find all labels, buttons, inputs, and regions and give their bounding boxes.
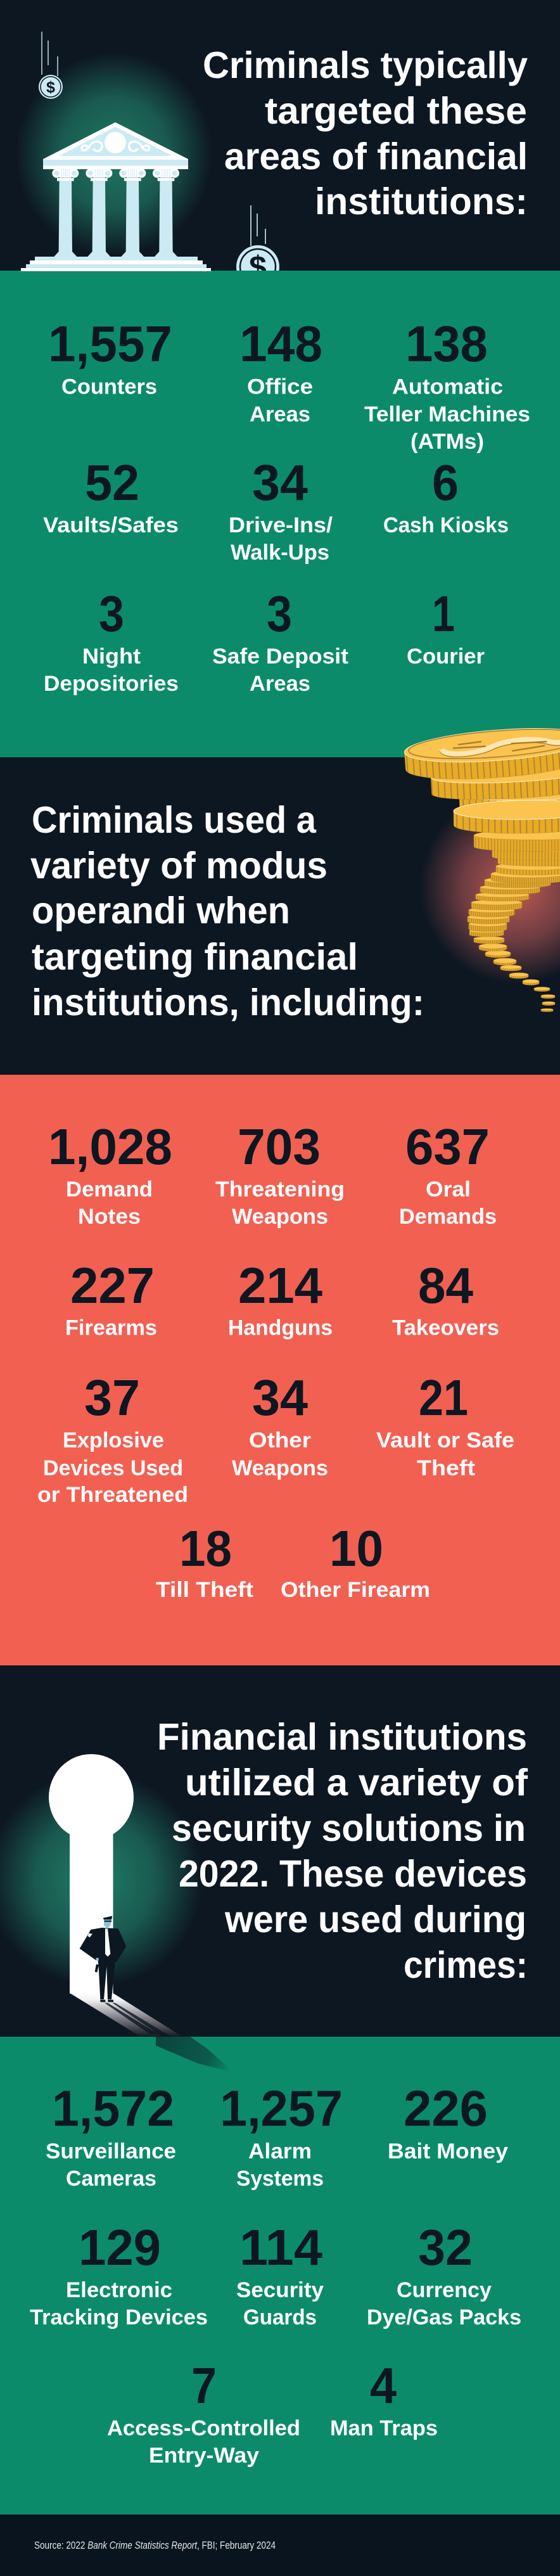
panel: targeted areas (0, 271, 560, 757)
icon: small falling coin: $ (46, 79, 55, 96)
stat: explosive devices: Devices Used (43, 1456, 183, 1480)
stat: surveillance cameras: 1,572 (52, 2080, 174, 2137)
stat: electronic tracking devices (30, 2219, 208, 2329)
stat: explosive devices: 37 (84, 1369, 140, 1426)
stat: night depositories (44, 586, 179, 696)
stat: office areas: Areas (250, 402, 310, 426)
heading: security solutions: 2022. These devices (179, 1853, 527, 1895)
heading: security solutions: utilized a variety of (185, 1762, 528, 1804)
stat: other firearm: Other Firearm (281, 1578, 430, 1602)
stat: handguns: Handguns (228, 1316, 333, 1340)
stat: safe deposit areas: Areas (250, 672, 310, 696)
stat: vault or safe theft (376, 1369, 514, 1480)
stat: drive-ins: Drive-Ins/ (229, 513, 333, 537)
icon: bank building with glow (16, 53, 212, 271)
stat: vaults and safes (43, 454, 179, 537)
stat: surveillance cameras (46, 2080, 176, 2191)
heading: modus operandi: operandi when (32, 890, 290, 932)
icon: falling coin behind green panel (236, 205, 279, 271)
stat: ATMs: Teller Machines (364, 402, 530, 426)
stat: takeovers: Takeovers (392, 1316, 499, 1340)
stat: currency dye and gas packs (367, 2219, 521, 2329)
stat: bait money (388, 2080, 508, 2163)
stat: alarm systems: Systems (236, 2167, 324, 2191)
heading: modus operandi: institutions, including: (32, 982, 424, 1023)
stat: firearms: 227 (70, 1257, 155, 1314)
heading: security solutions (157, 1716, 528, 1986)
stat: access-controlled entry-way: Access-Controlled (107, 2416, 300, 2440)
stat: cash kiosks: Cash Kiosks (383, 513, 509, 537)
stat: cash kiosks (383, 454, 509, 537)
stat: takeovers (392, 1257, 499, 1340)
stat: threatening weapons: 703 (238, 1118, 321, 1175)
stat: drive-ins (229, 454, 333, 565)
stat: ATMs (364, 316, 530, 454)
stat: vault or safe theft: Theft (417, 1456, 476, 1480)
heading: targeted areas: areas of financial (224, 136, 528, 177)
stat: counters: 1,557 (48, 316, 172, 372)
stat: oral demands: Oral (426, 1177, 471, 1201)
stat: bait money: 226 (404, 2080, 488, 2137)
stat: other weapons (232, 1369, 328, 1480)
stat: demand notes: Notes (78, 1205, 141, 1229)
stat: firearms: Firearms (65, 1316, 157, 1340)
stat: safe deposit areas: 3 (267, 586, 292, 642)
stat: other firearm: 10 (329, 1520, 383, 1577)
stat: security guards: Security (236, 2278, 324, 2302)
stat: threatening weapons: Threatening (215, 1177, 345, 1201)
stat: security guards: Guards (243, 2305, 317, 2329)
stat: demand notes (48, 1118, 172, 1229)
stat: surveillance cameras: Surveillance (46, 2139, 176, 2163)
heading: targeted areas: targeted these (265, 90, 527, 132)
stat: explosive devices (37, 1369, 188, 1507)
stat: currency dye and gas packs: Dye/Gas Packs (367, 2305, 521, 2329)
stat: oral demands: 637 (405, 1118, 490, 1175)
stat: till theft: Till Theft (156, 1578, 254, 1602)
stat: vault or safe theft: Vault or Safe (376, 1428, 514, 1452)
stat: till theft (156, 1520, 254, 1602)
heading: security solutions: security solutions in (172, 1807, 526, 1849)
stat: counters (48, 316, 172, 399)
stat: safe deposit areas (212, 586, 349, 696)
stat: office areas: 148 (239, 316, 322, 372)
stat: other firearm (281, 1520, 430, 1602)
heading: modus operandi: targeting financial (32, 936, 358, 978)
stat: courier (407, 586, 485, 669)
stat: man traps (330, 2357, 438, 2440)
stat: safe deposit areas: Safe Deposit (212, 644, 349, 669)
icon: small falling coin (39, 32, 63, 99)
stat: courier: 1 (432, 586, 455, 642)
stat: vault or safe theft: 21 (419, 1369, 468, 1426)
stat: counters: Counters (61, 375, 157, 399)
stat: cash kiosks: 6 (432, 454, 459, 511)
stat: other weapons: Weapons (232, 1456, 328, 1480)
stat: other weapons: Other (249, 1428, 311, 1452)
stat: drive-ins: 34 (252, 454, 309, 511)
stat: explosive devices: or Threatened (37, 1483, 188, 1507)
stat: alarm systems (220, 2080, 343, 2191)
stat: ATMs: Automatic (392, 375, 503, 399)
stat: bait money: Bait Money (388, 2139, 508, 2163)
stat: demand notes: Demand (66, 1177, 153, 1201)
stat: vaults and safes: Vaults/Safes (43, 513, 179, 537)
stat: office areas: Office (247, 375, 313, 399)
stat: vaults and safes: 52 (85, 454, 139, 511)
stat: security guards (236, 2219, 324, 2329)
stat: night depositories: 3 (99, 586, 124, 642)
stat: threatening weapons (215, 1118, 345, 1229)
heading: security solutions: crimes: (404, 1944, 528, 1986)
stat: handguns: 214 (238, 1257, 322, 1314)
stat: drive-ins: Walk-Ups (231, 541, 329, 565)
heading: modus operandi: variety of modus (30, 845, 328, 887)
stat: currency dye and gas packs: Currency (397, 2278, 492, 2302)
heading: security solutions: Financial institutions (157, 1716, 527, 1758)
stat: alarm systems: Alarm (248, 2139, 312, 2163)
icon: tornado of gold coins (404, 723, 560, 1011)
stat: explosive devices: Explosive (63, 1428, 164, 1452)
stat: till theft: 18 (179, 1520, 232, 1577)
stat: handguns (228, 1257, 333, 1340)
stat: access-controlled entry-way: 7 (191, 2357, 217, 2414)
stat: man traps: Man Traps (330, 2416, 438, 2440)
stat: ATMs: 138 (405, 316, 488, 372)
heading: targeted areas: institutions: (315, 181, 528, 222)
stat: security guards: 114 (239, 2219, 323, 2276)
stat: currency dye and gas packs: 32 (418, 2219, 473, 2276)
stat: electronic tracking devices: Tracking Devices (30, 2305, 208, 2329)
stat: surveillance cameras: Cameras (66, 2167, 156, 2191)
stat: electronic tracking devices: Electronic (66, 2278, 172, 2302)
stat: takeovers: 84 (418, 1257, 473, 1314)
heading: targeted areas (203, 44, 528, 222)
footer: source line (0, 2515, 560, 2576)
stat: oral demands: Demands (399, 1205, 497, 1229)
heading: modus operandi: Criminals used a (32, 799, 317, 841)
stat: ATMs: (ATMs) (410, 430, 484, 454)
stat: courier: Courier (407, 644, 485, 669)
heading: modus operandi (30, 799, 424, 1023)
icon: falling coin behind green panel: $ (249, 250, 267, 285)
stat: access-controlled entry-way (107, 2357, 300, 2468)
footer: source line: Source: 2022 Bank Crime Statistics Report, FBI; February 2024 (34, 2539, 276, 2551)
stat: access-controlled entry-way: Entry-Way (149, 2444, 259, 2468)
stat: threatening weapons: Weapons (232, 1205, 328, 1229)
stat: night depositories: Depositories (44, 672, 179, 696)
stat: electronic tracking devices: 129 (79, 2219, 161, 2276)
heading: targeted areas: Criminals typically (203, 44, 528, 86)
stat: oral demands (399, 1118, 497, 1229)
panel: modus operandi (0, 1075, 560, 1665)
stat: demand notes: 1,028 (48, 1118, 172, 1175)
stat: firearms (65, 1257, 157, 1340)
panel: security solutions (0, 2037, 560, 2515)
icon: keyhole with security guard (0, 1754, 231, 2072)
stat: alarm systems: 1,257 (220, 2080, 343, 2137)
heading: security solutions: were used during (224, 1899, 526, 1940)
stat: night depositories: Night (82, 644, 141, 669)
stat: office areas (239, 316, 322, 426)
stat: other weapons: 34 (252, 1369, 309, 1426)
stat: man traps: 4 (370, 2357, 397, 2414)
